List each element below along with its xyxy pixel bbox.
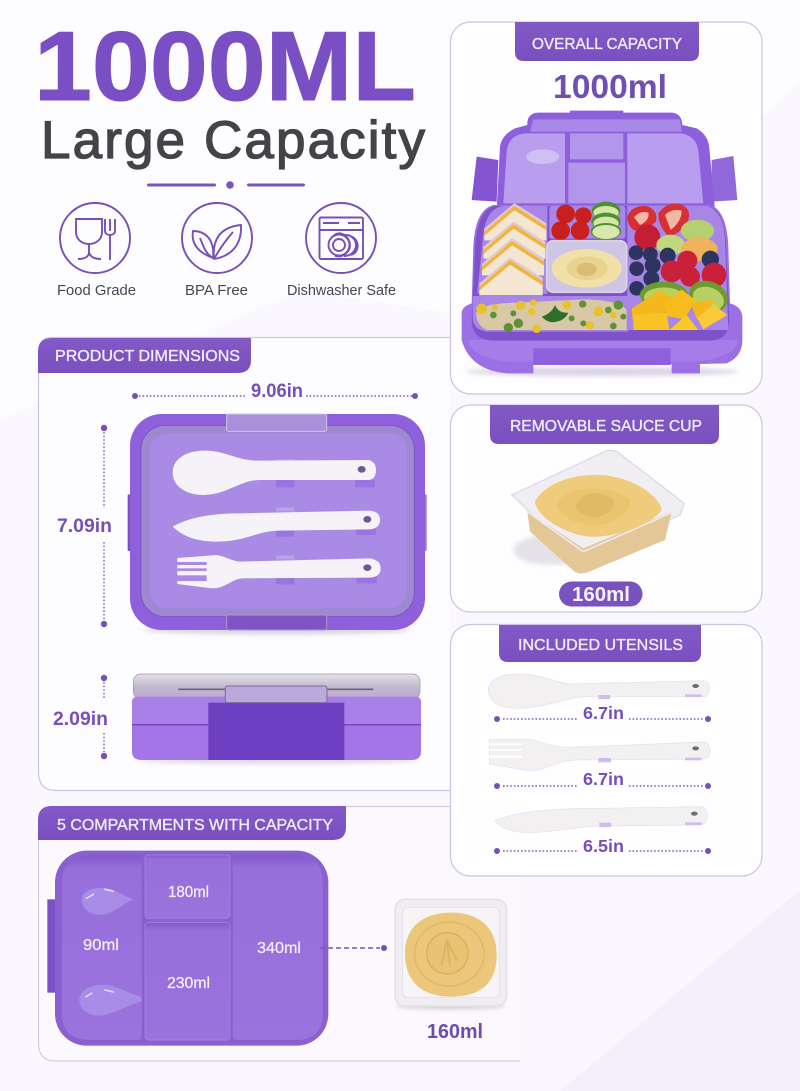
heading tab: 5 compartments: [38, 806, 346, 840]
rice salad: [476, 299, 627, 333]
label: BPA Free: BPA Free: [185, 283, 248, 299]
width dimension: 9.06in: [132, 380, 418, 402]
fork: [176, 555, 381, 588]
icon: BPA free leaf: [182, 203, 252, 273]
sandwiches: [479, 203, 546, 295]
spoon rest bumps: [79, 888, 142, 1016]
heading tab: included utensils: [499, 625, 701, 662]
lunch box side view: [132, 674, 421, 764]
heading tab: 5 compartments: 5 COMPARTMENTS WITH CAPACITY: [57, 817, 333, 834]
title: [34, 11, 426, 170]
lid and clasps: [472, 111, 737, 210]
dashed connector: [320, 945, 387, 951]
dimension: fork 6.7in: [494, 769, 711, 789]
capacity value: 1000ml: 1000ml: [553, 69, 667, 106]
capacity label: 90ml: 90ml: [83, 937, 119, 954]
depth dimension: 2.09in: [53, 675, 108, 759]
sauce cup photo: [512, 450, 684, 573]
dimension: spoon 6.7in: [494, 703, 711, 723]
panel: product dimensions: [38, 338, 450, 790]
panel: overall capacity: [450, 22, 762, 394]
label: Dishwasher Safe: Dishwasher Safe: [287, 283, 396, 299]
heading tab: included utensils: INCLUDED UTENSILS: [518, 637, 683, 654]
lunch box with food: [462, 111, 742, 376]
knife: [173, 511, 380, 542]
capacity pill: 160ml: 160ml: [572, 583, 630, 606]
label: 160ml: 160ml: [427, 1021, 483, 1043]
capacity label: 230ml: 230ml: [167, 975, 210, 992]
dimension: knife 6.5in: [494, 836, 711, 856]
height dimension: 7.09in: 7.09in: [57, 515, 112, 537]
feature icons row: [57, 203, 396, 299]
spoon: [173, 451, 376, 495]
fruit: [627, 204, 732, 330]
heading tab: product dimensions: PRODUCT DIMENSIONS: [55, 348, 240, 365]
heading: Large Capacity: Large Capacity: [41, 111, 426, 170]
tomatoes: [551, 205, 592, 240]
panel: included utensils: [450, 624, 762, 876]
compartment tray: [47, 851, 328, 1046]
cucumbers: [591, 202, 621, 240]
sauce cup with hummus: [547, 241, 627, 292]
heading tab: overall capacity: [515, 22, 699, 61]
dimension: spoon 6.7in: 6.7in: [583, 703, 624, 723]
utensil: fork: [488, 739, 710, 771]
capacity pill: 160ml: [559, 582, 642, 606]
width dimension: 9.06in: 9.06in: [251, 380, 303, 402]
icon: food grade: [60, 203, 130, 273]
heading tab: overall capacity: OVERALL CAPACITY: [532, 36, 682, 53]
base: [462, 205, 742, 373]
dimension: knife 6.5in: 6.5in: [583, 836, 624, 856]
height dimension: 7.09in: [57, 425, 112, 627]
heading tab: removable sauce cup: [490, 405, 719, 444]
heading tab: product dimensions: [38, 338, 251, 373]
title divider: [147, 181, 305, 189]
depth dimension: 2.09in: 2.09in: [53, 708, 108, 730]
panel: removable sauce cup: [450, 405, 762, 612]
utensil: knife: [495, 807, 707, 833]
capacity label: 340ml: 340ml: [257, 940, 301, 957]
capacity label: 180ml: 180ml: [168, 884, 209, 901]
lunch box top view with utensils: [128, 414, 427, 635]
heading tab: removable sauce cup: REMOVABLE SAUCE CUP: [510, 418, 702, 435]
heading: 1000ML: 1000ML: [34, 11, 416, 121]
sauce cup top view: [395, 899, 507, 1009]
icon: dishwasher: [306, 203, 376, 273]
label: Food Grade: Food Grade: [57, 283, 136, 299]
utensil: spoon: [488, 674, 709, 708]
dimension: fork 6.7in: 6.7in: [583, 769, 624, 789]
panel: five compartments: [38, 806, 520, 1061]
